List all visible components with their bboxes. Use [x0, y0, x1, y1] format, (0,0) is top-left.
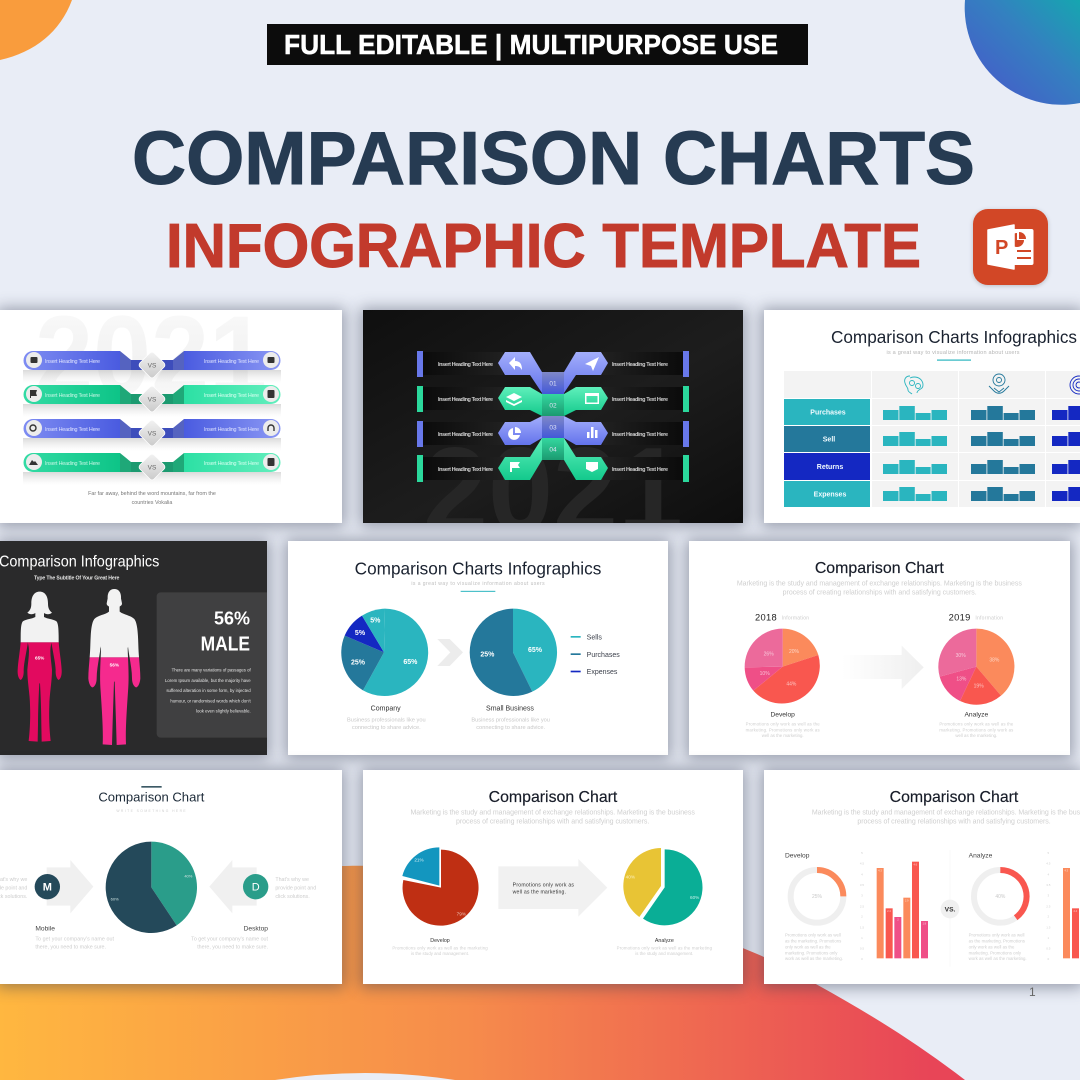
panel: mobile desktop pie — [0, 770, 342, 984]
captions: Promotions only work as well as the — [939, 721, 1014, 726]
centre column: 03 — [549, 424, 557, 432]
hexagon arms — [498, 352, 608, 480]
row 1 — [23, 351, 281, 383]
legend: Sells — [587, 634, 602, 641]
captions: well as the marketing. — [955, 733, 997, 738]
pie: develop: 21% — [414, 858, 424, 863]
develop bars: 4.3 — [878, 869, 882, 873]
panel: dark hexagon comparison — [363, 310, 743, 523]
labels: Insert Heading Text Here — [612, 397, 668, 403]
year labels — [755, 613, 1003, 623]
captions: marketing. Promotions only work as — [746, 727, 820, 732]
pie: small business — [470, 609, 557, 696]
analyze bars: 0.5 — [1046, 946, 1051, 950]
analyze bars: 1 — [1047, 936, 1049, 940]
panel: pink pies 2018 2019 — [689, 541, 1070, 755]
pie 2018: 26% — [764, 651, 774, 657]
heading: Comparison Chart — [890, 789, 1019, 806]
text: right side: click solutions. — [275, 894, 310, 900]
labels: Insert Heading Text Here — [612, 467, 668, 473]
heading: Comparison Charts Infographics — [831, 327, 1077, 347]
bars column 1 — [883, 406, 947, 501]
bars column 3 — [1052, 406, 1080, 501]
develop bars: 3 — [861, 894, 863, 898]
pie: analyze — [623, 848, 702, 925]
info card: suffered alteration in some form, by injected — [166, 688, 251, 693]
info card: Lorem Ipsum available, but the majority have — [165, 678, 251, 683]
heading: Comparison Infographics — [0, 553, 159, 570]
pie 2019: 19% — [974, 683, 984, 689]
woman figure: 65% — [35, 655, 45, 660]
centre column — [542, 372, 564, 460]
text: right side — [275, 877, 316, 900]
captions — [746, 711, 1014, 738]
labels: Insert Heading Text Here — [438, 362, 493, 368]
row 2: Insert Heading Text Here — [45, 393, 100, 399]
row 3: VS — [148, 430, 157, 438]
analyze donut: as the marketing. Promotions — [969, 939, 1025, 944]
panel: white VS bars — [0, 310, 342, 523]
labels: Insert Heading Text Here — [438, 467, 493, 473]
analyze bars: 4.3 — [1064, 869, 1069, 873]
arrow — [842, 646, 924, 689]
row 4: VS — [148, 464, 157, 472]
row 1: VS — [148, 362, 157, 370]
analyze donut: Analyze — [969, 853, 993, 860]
pie: analyze: 60% — [690, 895, 699, 900]
heading: Type The Subtitle Of Your Great Here — [34, 575, 119, 581]
side bars — [417, 351, 689, 482]
analyze bars: 3.5 — [1046, 883, 1051, 887]
arrow with text — [498, 859, 607, 917]
row 1: Insert Heading Text Here — [45, 359, 100, 365]
heading — [812, 789, 1080, 825]
heading: Marketing is the study and management of exchange relationships. Marketing is the business — [737, 581, 1022, 588]
icon: PowerPoint: P — [995, 237, 1008, 259]
bars column 2 — [971, 406, 1035, 501]
labels — [438, 362, 668, 473]
table cells — [784, 371, 1080, 507]
captions: is the study and management. — [411, 951, 469, 956]
labels: Insert Heading Text Here — [438, 432, 493, 438]
caption: mobile: Mobile — [35, 926, 55, 933]
pie: analyze: 40% — [626, 875, 635, 880]
arrow with text: well as the marketing. — [513, 889, 566, 895]
vs badge: VS. — [945, 906, 956, 913]
develop bars — [860, 851, 928, 961]
pie: company: 5% — [370, 618, 381, 625]
year labels: 2019 — [949, 613, 970, 623]
heading: Comparison Chart — [98, 791, 205, 805]
captions: is the study and management. — [635, 951, 693, 956]
heading: Comparison Chart — [815, 560, 944, 577]
develop donut: only work as well as the — [785, 945, 831, 950]
caption: Far far away, behind the word mountains, far from the — [88, 491, 216, 497]
heading: process of creating relationships with and satisfying customers. — [456, 818, 649, 825]
analyze bars: 2.4 — [1073, 909, 1078, 913]
develop donut: marketing. Promotions only — [785, 950, 838, 955]
icon: handshake gear — [989, 374, 1009, 393]
info card: There are many variations of passages of — [172, 668, 251, 673]
develop bars: 2.9 — [905, 898, 909, 902]
pie 2019: 38% — [989, 658, 1000, 664]
heading: Comparison Chart — [489, 789, 618, 806]
pie 2019: 13% — [956, 677, 967, 683]
analyze bars: 2.5 — [1046, 904, 1051, 908]
develop donut: as the marketing. Promotions — [785, 939, 841, 944]
year labels: Information — [782, 615, 809, 621]
develop donut: 25% — [812, 894, 823, 900]
pie — [106, 842, 197, 933]
panel: separated pies — [363, 770, 743, 984]
develop bars: 2 — [861, 915, 863, 919]
develop bars: 2.4 — [887, 909, 891, 913]
woman figure — [18, 592, 62, 742]
page number: 1 — [1029, 985, 1036, 999]
captions — [392, 938, 713, 956]
caption: mobile: there, you need to make sure. — [35, 945, 106, 951]
captions: Analyze — [964, 711, 988, 718]
panel: teal pie comparison — [288, 541, 668, 755]
year labels: 2018 — [755, 613, 777, 623]
centre column: 04 — [549, 446, 557, 454]
captions: Promotions only work as well as the — [746, 721, 820, 726]
year labels: Information — [975, 615, 1003, 621]
row labels: Sell — [823, 436, 835, 444]
icon: heads — [905, 376, 923, 394]
caption: desktop — [191, 926, 269, 951]
pie 2018: 44% — [786, 681, 797, 687]
pie: small business: 25% — [480, 652, 495, 659]
caption: mobile: To get your company's name out — [35, 936, 115, 942]
text: right side: That's why we — [275, 877, 309, 883]
captions: well as the marketing. — [762, 733, 804, 738]
analyze donut: work as well as the marketing. — [969, 956, 1027, 961]
heading: process of creating relationships with and satisfying customers. — [857, 818, 1051, 825]
analyze bars — [1046, 851, 1079, 961]
row 2: VS — [148, 396, 157, 404]
heading: Marketing is the study and management of exchange relationships. Marketing is the business — [410, 810, 695, 817]
legend — [571, 634, 620, 676]
icon: target — [1070, 376, 1080, 394]
analyze bars: 5 — [1047, 851, 1049, 855]
badge: desktop — [243, 874, 268, 899]
captions: marketing. Promotions only work as — [939, 727, 1013, 732]
analyze bars: 2 — [1047, 915, 1049, 919]
develop donut: Promotions only work as well — [785, 933, 841, 938]
develop bars: 1 — [861, 936, 863, 940]
captions: Small Business — [486, 706, 534, 713]
pie 2019 — [938, 629, 1014, 705]
badge: desktop: D — [252, 882, 260, 894]
heading: Comparison Charts Infographics — [355, 558, 602, 578]
heading: is a great way to visualize information about users — [411, 581, 545, 587]
labels: Insert Heading Text Here — [612, 432, 668, 438]
develop bars: 2.5 — [860, 904, 864, 908]
analyze donut: Promotions only work as well — [969, 933, 1025, 938]
captions: connecting to share advice. — [476, 725, 546, 731]
analyze donut — [969, 853, 1027, 961]
legend: Purchases — [587, 652, 620, 659]
man figure: 56% — [110, 663, 120, 668]
captions: Promotions only work as well as the marketing — [392, 945, 488, 950]
badge: mobile — [35, 874, 60, 899]
develop bars: 4 — [861, 872, 863, 876]
row 1: Insert Heading Text Here — [204, 359, 259, 365]
heading — [737, 560, 1022, 596]
develop bars: 1.5 — [860, 925, 864, 929]
heading — [0, 553, 159, 581]
captions: Business professionals like you — [471, 717, 550, 723]
develop donut: work as well as the marketing. — [785, 956, 843, 961]
pie: 40% — [184, 874, 193, 879]
pie 2018: 10% — [760, 671, 770, 677]
captions: Analyze — [655, 938, 674, 944]
row labels: Purchases — [810, 410, 846, 416]
develop bars: 3.5 — [860, 883, 864, 887]
caption: desktop: there, you need to make sure. — [197, 945, 268, 951]
pie 2019: 30% — [956, 653, 966, 659]
heading — [98, 786, 205, 813]
analyze bars: 0 — [1047, 957, 1049, 961]
pie: develop — [402, 847, 479, 926]
row 3: Insert Heading Text Here — [45, 427, 100, 433]
row labels — [784, 399, 870, 507]
info card: humour, or randomised words which don't — [170, 698, 251, 703]
badge: mobile: M — [43, 882, 52, 894]
develop donut — [785, 853, 843, 961]
develop bars: 1.8 — [922, 922, 927, 926]
caption: mobile — [35, 926, 115, 951]
caption — [88, 491, 216, 506]
hexagon icons — [506, 357, 599, 472]
vs badge — [941, 900, 959, 918]
captions: Promotions only work as well as the marketing — [617, 945, 713, 950]
pie: 60% — [111, 897, 119, 902]
pie: company: 25% — [351, 660, 366, 667]
caption: countries Vokalia — [132, 500, 172, 506]
develop bars: 0.5 — [860, 946, 864, 950]
analyze donut: marketing. Promotions only — [969, 950, 1022, 955]
centre column: 01 — [549, 380, 557, 388]
pie: company — [341, 609, 428, 696]
centre column: 02 — [549, 402, 557, 410]
captions: Develop — [430, 938, 450, 944]
info card: look even slightly believable. — [196, 708, 251, 713]
info card: MALE — [201, 634, 250, 656]
row 4 — [23, 453, 281, 485]
heading: process of creating relationships with and satisfying customers. — [783, 589, 977, 596]
legend: Expenses — [587, 669, 618, 676]
heading — [410, 789, 695, 825]
icon: PowerPoint — [971, 208, 1050, 288]
row 4: Insert Heading Text Here — [204, 461, 259, 467]
captions: connecting to share advice. — [352, 725, 421, 731]
caption: desktop: Desktop — [244, 926, 268, 933]
info card — [157, 592, 273, 738]
captions: Develop — [770, 711, 795, 718]
panel: body comparison — [0, 541, 267, 755]
arrow with text: Promotions only work as — [513, 882, 574, 888]
pie: develop: 79% — [457, 911, 466, 916]
analyze bars: 4.5 — [1046, 862, 1051, 866]
captions: Company — [371, 706, 401, 713]
man figure — [88, 589, 140, 745]
pie: small business: 65% — [528, 647, 543, 654]
labels: Insert Heading Text Here — [612, 362, 668, 368]
analyze donut: only work as well as the — [969, 945, 1015, 950]
pie 2018 — [745, 629, 820, 704]
text: right side: provide point and — [275, 885, 316, 891]
heading — [831, 327, 1077, 361]
develop bars: 2 — [897, 918, 899, 922]
caption: desktop: To get your company's name out — [191, 936, 269, 942]
text: left side — [0, 877, 27, 900]
row 3: Insert Heading Text Here — [204, 427, 259, 433]
heading — [355, 558, 602, 592]
arrows — [47, 860, 257, 913]
row 2 — [23, 385, 281, 417]
panel: comparison table — [764, 310, 1080, 523]
panel: donuts and bars — [764, 770, 1080, 984]
row 4: Insert Heading Text Here — [45, 461, 100, 467]
develop donut: Develop — [785, 853, 810, 860]
heading: is a great way to visualize information about users — [886, 350, 1020, 356]
develop bars: 4.5 — [860, 862, 864, 866]
analyze donut: 40% — [995, 894, 1006, 900]
info card: 56% — [214, 607, 250, 628]
banner: FULL EDITABLE | MULTIPURPOSE USE — [284, 29, 778, 60]
analyze bars: 4 — [1047, 872, 1049, 876]
arrow chevron — [437, 639, 463, 666]
analyze bars: 3 — [1047, 894, 1049, 898]
row labels: Expenses — [814, 492, 846, 498]
captions — [347, 706, 550, 731]
develop bars: 5 — [861, 851, 863, 855]
row labels: Returns — [817, 464, 843, 471]
develop bars: 4.6 — [913, 862, 918, 866]
pie 2018: 20% — [789, 649, 800, 655]
labels: Insert Heading Text Here — [438, 397, 493, 403]
analyze bars: 1.5 — [1046, 925, 1051, 929]
row 3 — [23, 419, 281, 451]
pie: company: 65% — [403, 659, 418, 666]
develop bars: 0 — [861, 957, 863, 961]
pie: company: 5% — [355, 630, 366, 637]
captions: Business professionals like you — [347, 717, 426, 723]
heading: WRITE SOMETHING HERE — [116, 809, 186, 813]
row 2: Insert Heading Text Here — [204, 393, 259, 399]
